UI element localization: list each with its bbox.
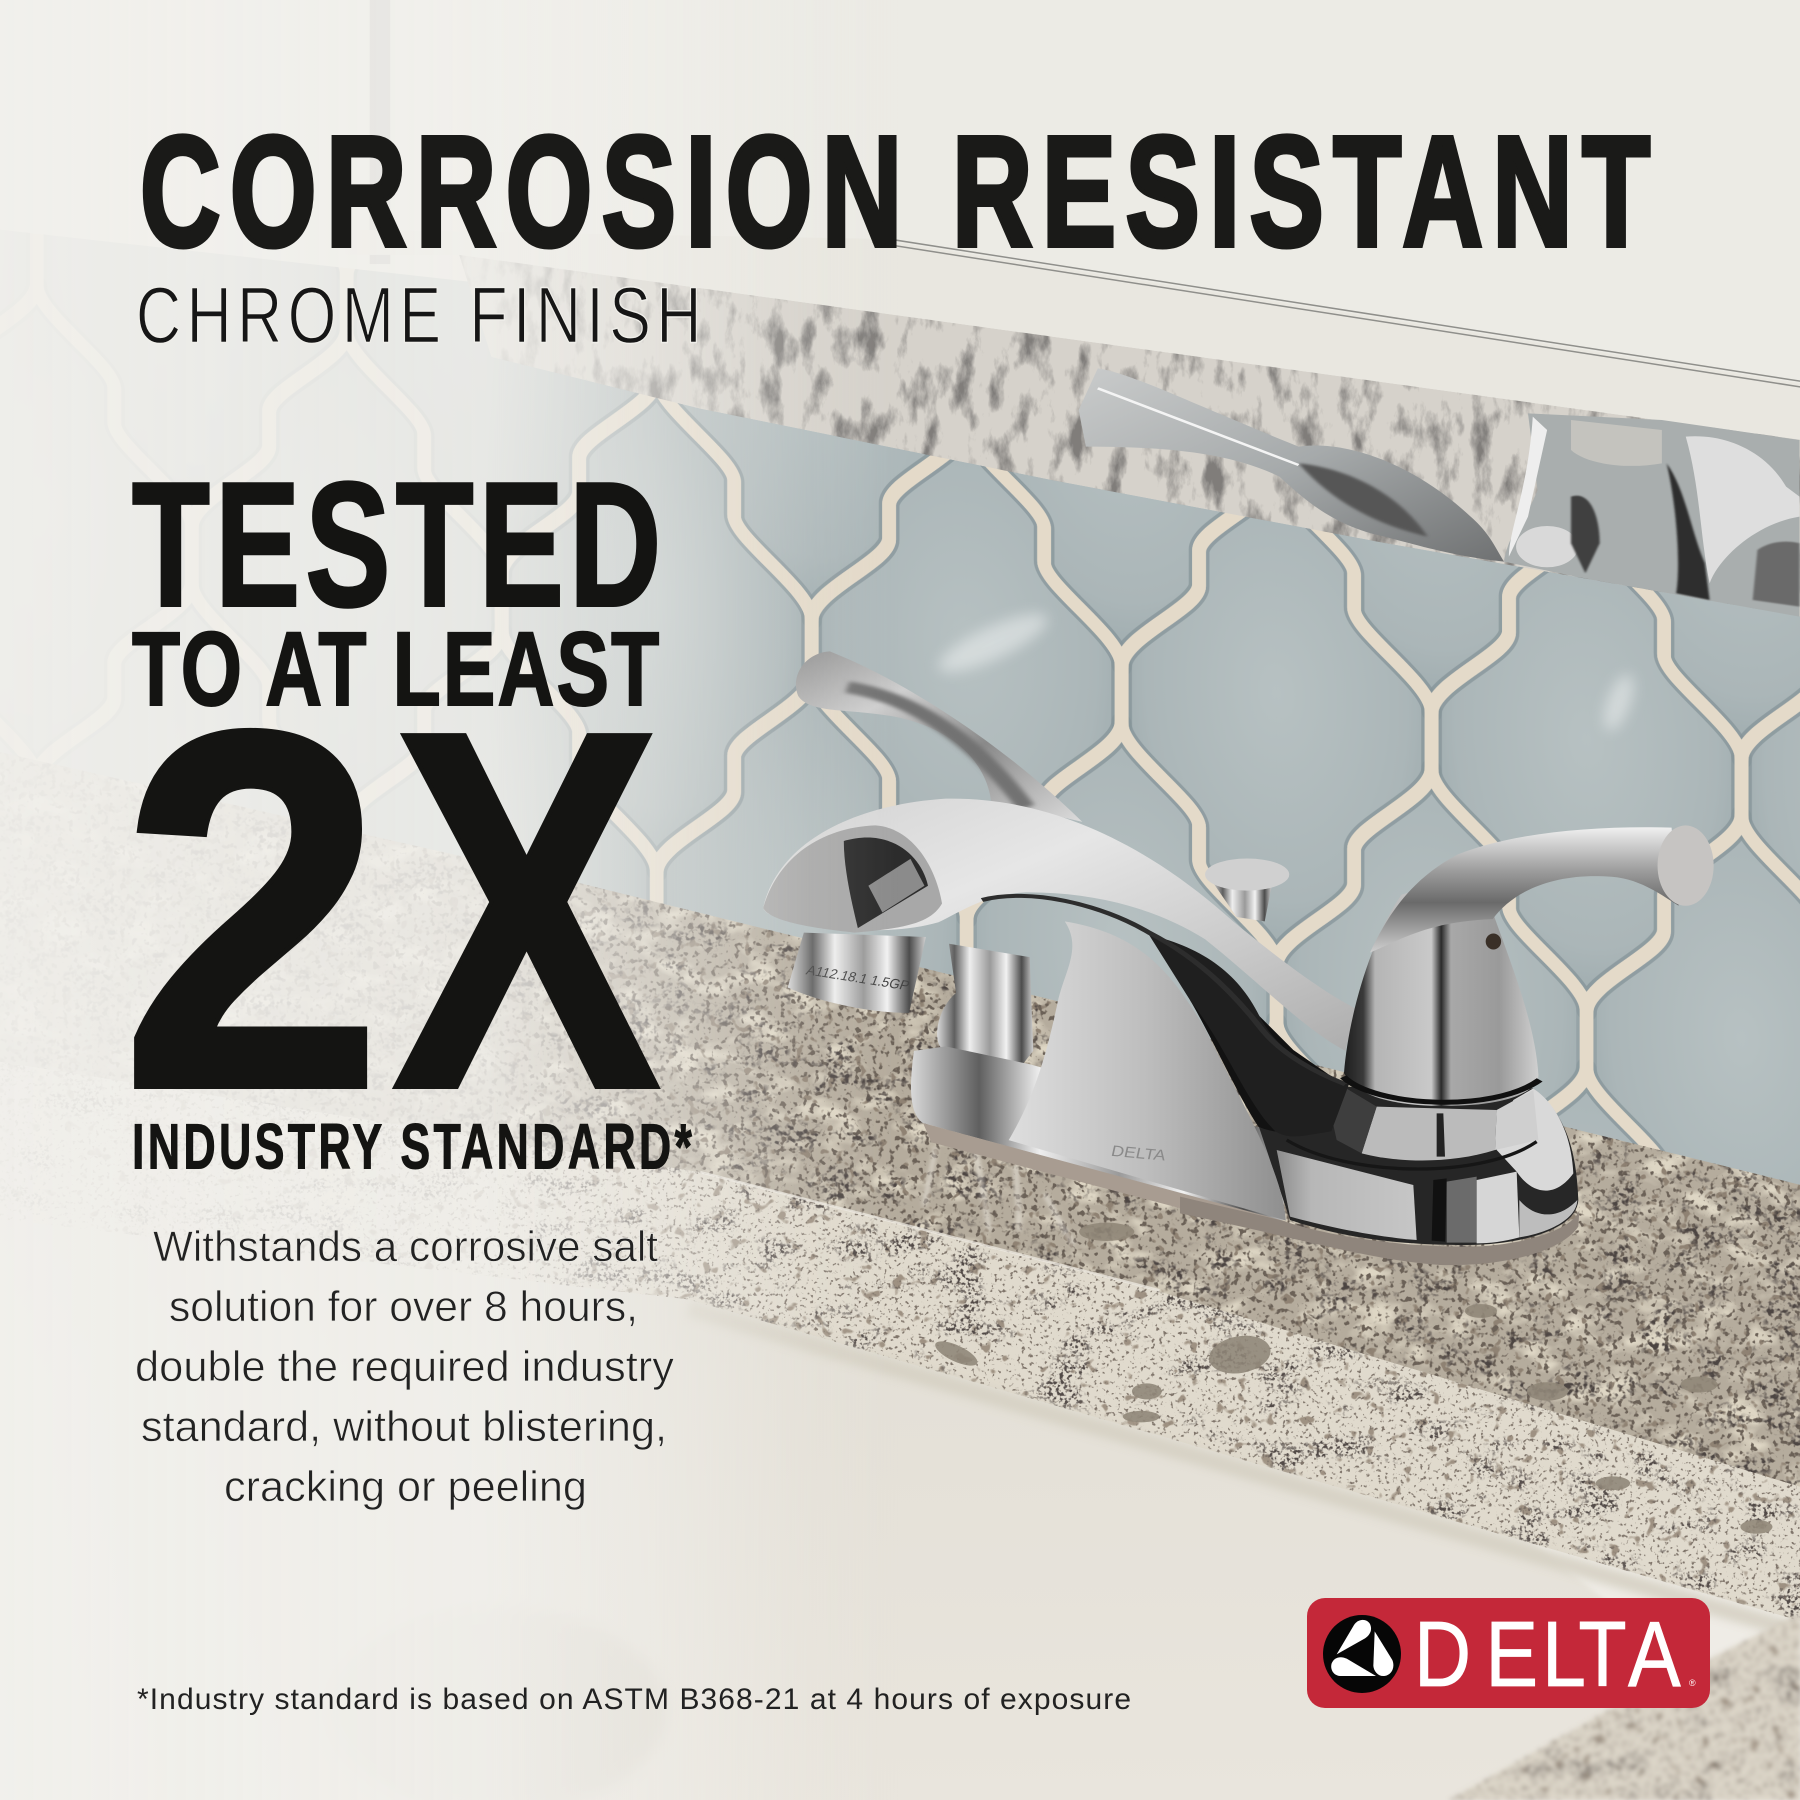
faucet front parts [763,799,1714,1220]
right lever [1370,827,1679,953]
sink basin [0,1194,1800,1800]
inclusion top surface [1079,1223,1134,1241]
faucet maker mark: DELTA [1110,1143,1168,1164]
right drop [1373,1631,1393,1676]
inclusion right two [1465,1304,1497,1318]
spout head [763,825,942,933]
2X figure [120,626,663,1195]
countertop surface [0,752,1800,1492]
inclusion right five [1336,1213,1373,1225]
base plate [911,1046,1289,1221]
mirror bevel strip [344,230,1800,440]
left base gasket [923,1123,1286,1236]
reflected bright patch [1686,436,1800,583]
aerator [788,933,926,1013]
stopper cap [1205,858,1289,891]
description line 1: Withstands a corrosive salt [153,1223,658,1271]
sink lip [1527,1538,1800,1665]
mirror upper glass [390,0,1800,383]
spout head highlight [868,859,924,912]
countertop edge highlight [700,1172,1159,1290]
faded sink shadow [321,1607,666,1800]
reflected faucet in mirror [1079,368,1800,617]
right base detail [1180,1000,1579,1265]
reflected spout [1504,413,1800,617]
base body [1257,1087,1578,1245]
glaze streak right [1598,671,1640,735]
industry standard: INDUSTRY STANDARD* [132,1111,692,1182]
collar [1362,1107,1497,1160]
glaze streak left [932,603,1054,683]
granite inclusions [932,1213,1773,1534]
inclusion far right [1740,1520,1773,1534]
Delta logo [1307,1598,1710,1708]
headline: corrosion resistant: CORROSION RESISTANT [140,104,1650,279]
drain stopper knob [1205,858,1289,921]
handle screw hole [1486,933,1501,950]
description line 3: double the required industry [135,1343,674,1391]
claim block: tested to at least 2X [120,445,692,1195]
inclusion left front [932,1337,980,1370]
reflected handle dark core [1299,463,1428,537]
faucet rear parts [796,651,1289,1236]
reflected handle highlight [1098,388,1299,465]
spout body [763,799,1356,1051]
aerator marking: A112.18.1 1.5GP [804,962,912,993]
reflected bulb [1516,526,1578,567]
lever end face [1658,825,1714,906]
right dark arc [1520,1173,1577,1214]
center escutcheon [1009,921,1286,1220]
collar dark seam [1437,1113,1445,1157]
front bright panel [1277,1150,1417,1240]
logo red plate [1307,1598,1710,1708]
cone ring [1343,1077,1540,1102]
corner granite [1449,1613,1800,1800]
inclusion right one [1527,1382,1568,1401]
reflected dark strip two [1667,463,1710,600]
handle arm [796,651,1082,822]
right light shoulder [1497,1088,1573,1191]
upper dark recess [1190,1000,1337,1132]
description paragraph [135,1223,674,1511]
letter X: X [392,626,663,1195]
reflected dark strip one [1571,496,1600,573]
logo wordmark: DELTA [1414,1603,1681,1706]
description line 4: standard, without blistering, [141,1403,667,1451]
stopper stem [1212,881,1272,921]
lower right panel [1519,1200,1577,1237]
left drop [1331,1657,1376,1676]
countertop front edge [0,1062,1800,1621]
tile glaze highlights [932,603,1640,735]
to at least: TO AT LEAST [132,610,659,728]
base lower seam [1432,1178,1447,1242]
subhead: chrome finish: CHROME FINISH [136,271,701,360]
faucet reflection streaks [924,1148,1073,1246]
mirror vertical frame [370,0,390,264]
inclusion large front [1206,1331,1274,1378]
right handle body [1344,877,1538,1106]
inclusion right three [1681,1376,1717,1393]
brushed glare panel [1477,1172,1519,1243]
handle shading [847,687,1026,808]
collar left reflection [1330,1087,1377,1153]
registered mark: ® [1689,1678,1696,1688]
inclusion right four [1596,1476,1630,1490]
description line 2: solution for over 8 hours, [169,1283,638,1331]
shadow below countertop [689,1309,1800,1632]
reflected highlight strip [1509,417,1547,557]
logo black circle [1323,1615,1401,1693]
reflected collar [1571,420,1662,466]
back handle [796,651,1082,822]
tested: TESTED [132,445,661,643]
second countertop corner [1449,1613,1800,1800]
dark reflection [1149,935,1349,1136]
description line 5: cracking or peeling [224,1463,587,1511]
base contour line [1287,1140,1537,1169]
marble shelf reflection [459,255,1800,616]
front mid panel [1447,1177,1477,1243]
spout contour [982,896,1345,1084]
inclusion lower two [1123,1411,1159,1422]
spout head reflection [844,838,928,928]
inclusion lower [1132,1383,1162,1399]
footnote: *Industry standard is based on ASTM B368-21 at 4 hours of exposure [137,1683,1131,1716]
gasket [1180,1197,1579,1265]
logo tri-drop mark [1331,1620,1393,1676]
tile backsplash [0,230,1800,1205]
digit 2: 2 [120,626,384,1195]
reflected right dark [1753,542,1800,607]
collar right [1495,1090,1538,1150]
reflected handle [1079,368,1504,562]
left post [937,944,1033,1073]
top drop [1337,1620,1371,1654]
bevel edge lines [872,236,1800,387]
